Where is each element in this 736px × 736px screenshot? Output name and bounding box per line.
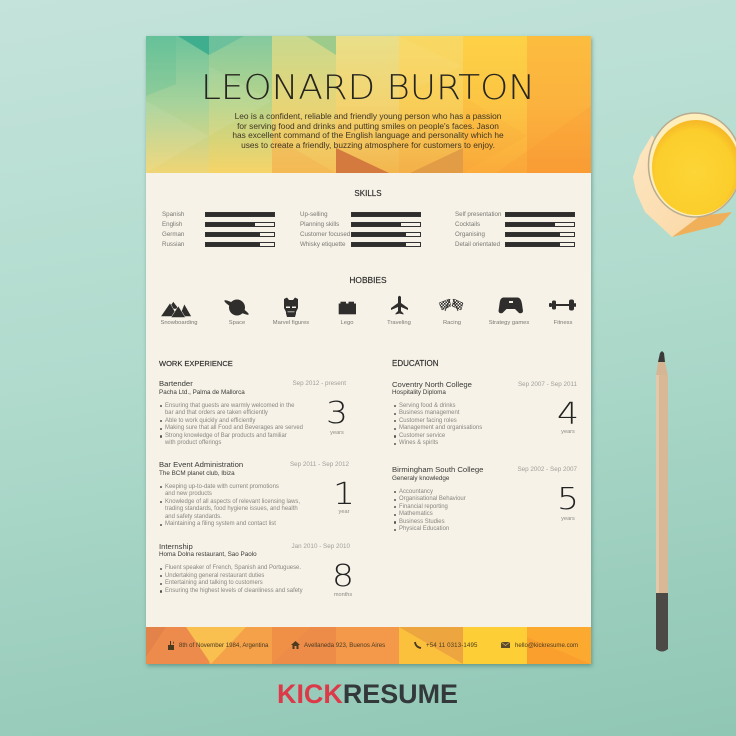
glass of orange juice bbox=[633, 112, 736, 237]
job: bar event administration: trading standards, food hygiene issues, and health bbox=[165, 506, 298, 512]
hobby labels: Racing bbox=[443, 320, 461, 326]
job: internship bbox=[159, 542, 354, 598]
hobby labels: Traveling bbox=[387, 320, 411, 326]
skills chart: Customer focused bbox=[300, 230, 350, 238]
hobby labels: Fitness bbox=[554, 320, 572, 326]
education: coventry north college: Wines & spirits bbox=[399, 440, 438, 446]
job: bar event administration: Keeping up-to-date with current promotions bbox=[165, 484, 279, 490]
job: internship: Jan 2010 - Sep 2010 bbox=[292, 542, 350, 550]
job: bartender: Ensuring that guests are warmly welcomed in the bbox=[165, 402, 294, 408]
skills chart: Organising bbox=[455, 230, 485, 238]
intro paragraph bbox=[232, 111, 504, 150]
education: birmingham south college bbox=[392, 465, 579, 532]
education: birmingham south college: Mathematics bbox=[399, 511, 433, 517]
skills chart: Up-selling bbox=[300, 210, 328, 218]
education: birmingham south college: Birmingham South College bbox=[392, 465, 483, 474]
job: bar event administration: year bbox=[339, 509, 349, 515]
job: bar event administration: and new products bbox=[165, 491, 212, 497]
intro paragraph: uses to create a friendly, buzzing atmosphere for customers to enjoy. bbox=[241, 140, 495, 150]
job: bartender: Strong knowledge of Bar products and familiar bbox=[165, 433, 287, 439]
job: internship: Fluent speaker of French, Spanish and Portuguese. bbox=[165, 565, 301, 571]
icon: dumbbell bbox=[549, 300, 576, 310]
education: coventry north college: Serving food & drinks bbox=[399, 402, 455, 408]
job: bartender: 3 bbox=[326, 396, 348, 431]
job: bartender: Bartender bbox=[159, 379, 193, 388]
job: bar event administration: and safety standards. bbox=[165, 514, 222, 520]
job: bartender: years bbox=[330, 430, 344, 436]
skills chart bbox=[162, 210, 575, 248]
job: internship: Ensuring the highest levels of cleanliness and safety bbox=[165, 588, 303, 594]
education: coventry north college: 4 bbox=[557, 397, 579, 432]
job: internship: Homa Dolna restaurant, Sao Paolo bbox=[159, 551, 257, 558]
education: birmingham south college: years bbox=[561, 516, 575, 522]
education: coventry north college: Customer facing roles bbox=[399, 418, 457, 424]
intro paragraph: for serving food and drinks and putting smiles on people's faces. Jason bbox=[237, 121, 499, 131]
hobby labels bbox=[160, 320, 572, 326]
icon: planet bbox=[223, 298, 250, 317]
footer contact details: Avellaneda 923, Buenos Aires bbox=[304, 642, 385, 649]
education: coventry north college: Hospitality Diploma bbox=[392, 389, 446, 396]
job: bar event administration bbox=[159, 460, 355, 527]
education: birmingham south college: Accountancy bbox=[399, 488, 433, 494]
brand logo: KICKRESUME bbox=[277, 679, 458, 709]
icon: birth bbox=[168, 641, 174, 650]
icon: racing flags bbox=[439, 299, 463, 311]
education: coventry north college: Coventry North College bbox=[392, 380, 472, 389]
education: birmingham south college: Sep 2002 - Sep 2007 bbox=[517, 466, 577, 473]
job: bartender bbox=[159, 379, 348, 446]
job: bar event administration: Knowledge of all aspects of relevant licensing laws, bbox=[165, 499, 300, 505]
education: birmingham south college: Business Studies bbox=[399, 519, 445, 525]
skills chart: Cocktails bbox=[455, 220, 480, 228]
icon: airplane bbox=[391, 296, 408, 314]
intro paragraph: has excellent command of the English language and personality which he bbox=[232, 130, 504, 140]
hobby icons row bbox=[160, 296, 576, 318]
education: coventry north college: Management and organisations bbox=[399, 425, 482, 431]
education: coventry north college: Customer service bbox=[399, 433, 445, 439]
job: internship: 8 bbox=[332, 558, 354, 594]
education: birmingham south college: Organisational Behaviour bbox=[399, 496, 466, 502]
icon: game controller bbox=[498, 298, 523, 313]
heading: work experience: WORK EXPERIENCE bbox=[159, 359, 233, 368]
job: bar event administration: Bar Event Administration bbox=[159, 460, 243, 469]
education: birmingham south college: Financial reporting bbox=[399, 504, 448, 510]
icon: phone bbox=[414, 642, 422, 649]
education: coventry north college: Business management bbox=[399, 410, 459, 416]
heading: skills: SKILLS bbox=[354, 189, 382, 198]
footer contact details: 8th of November 1984, Argentina bbox=[179, 642, 268, 649]
intro paragraph: Leo is a confident, reliable and friendly young person who has a passion bbox=[235, 111, 501, 121]
skills chart: Planning skills bbox=[300, 220, 339, 228]
hobby labels: Space bbox=[229, 320, 245, 326]
skills chart: Detail orientated bbox=[455, 240, 500, 248]
job: bartender: with product offerings bbox=[165, 440, 221, 446]
hobby labels: Snowboarding bbox=[160, 320, 198, 326]
job: bartender: bar and that orders are taken efficiently bbox=[165, 410, 268, 416]
education: coventry north college: years bbox=[561, 429, 575, 435]
job: internship: Entertaining and talking to customers bbox=[165, 580, 263, 586]
footer contact details: hello@kickresume.com bbox=[515, 642, 578, 649]
icon: mountains bbox=[161, 302, 192, 318]
icon: envelope bbox=[501, 642, 510, 648]
education: coventry north college bbox=[392, 380, 579, 446]
job: bar event administration: The BCM planet club, Ibiza bbox=[159, 470, 235, 477]
hobby labels: Lego bbox=[341, 320, 353, 326]
heading: education: EDUCATION bbox=[392, 359, 439, 368]
icon: iron man helmet bbox=[284, 298, 298, 317]
title: LEONARD BURTON bbox=[201, 68, 535, 108]
job: internship: Internship bbox=[159, 542, 193, 550]
job: bartender: Sep 2012 - present bbox=[292, 380, 346, 387]
job: bartender: Making sure that all Food and Beverages are served bbox=[165, 425, 303, 431]
skills chart: English bbox=[162, 220, 182, 228]
education: birmingham south college: Physical Education bbox=[399, 526, 449, 532]
pencil bbox=[656, 351, 668, 652]
job: internship: months bbox=[334, 592, 352, 598]
footer contact details bbox=[168, 641, 578, 650]
icon: lego brick bbox=[339, 302, 356, 314]
icon: house bbox=[291, 641, 300, 649]
education: coventry north college: Sep 2007 - Sep 2011 bbox=[518, 381, 577, 388]
skills chart: Russian bbox=[162, 240, 184, 248]
skills chart: Self presentation bbox=[455, 210, 501, 218]
job: bartender: Able to work quickly and efficiently bbox=[165, 418, 255, 424]
job: bar event administration: 1 bbox=[333, 477, 355, 512]
skills chart: Whisky etiquette bbox=[300, 240, 345, 248]
job: internship: Undertaking general restaurant duties bbox=[165, 573, 264, 579]
education: birmingham south college: Generaly knowledge bbox=[392, 475, 449, 482]
footer contact details: +54 11 0313-1495 bbox=[426, 642, 478, 649]
heading: hobbies: HOBBIES bbox=[349, 275, 387, 285]
job: bar event administration: Sep 2011 - Sep 2012 bbox=[290, 461, 349, 468]
header banner bbox=[146, 36, 591, 173]
footer banner bbox=[146, 627, 591, 664]
hobby labels: Marvel figures bbox=[273, 320, 309, 326]
skills chart: Spanish bbox=[162, 210, 184, 218]
job: bar event administration: Maintaining a filing system and contact list bbox=[165, 521, 276, 527]
education: birmingham south college: 5 bbox=[557, 482, 579, 517]
hobby labels: Strategy games bbox=[489, 320, 529, 326]
job: bartender: Pacha Ltd., Palma de Mallorca bbox=[159, 389, 245, 396]
skills chart: German bbox=[162, 230, 184, 238]
resume paper bbox=[146, 36, 591, 664]
